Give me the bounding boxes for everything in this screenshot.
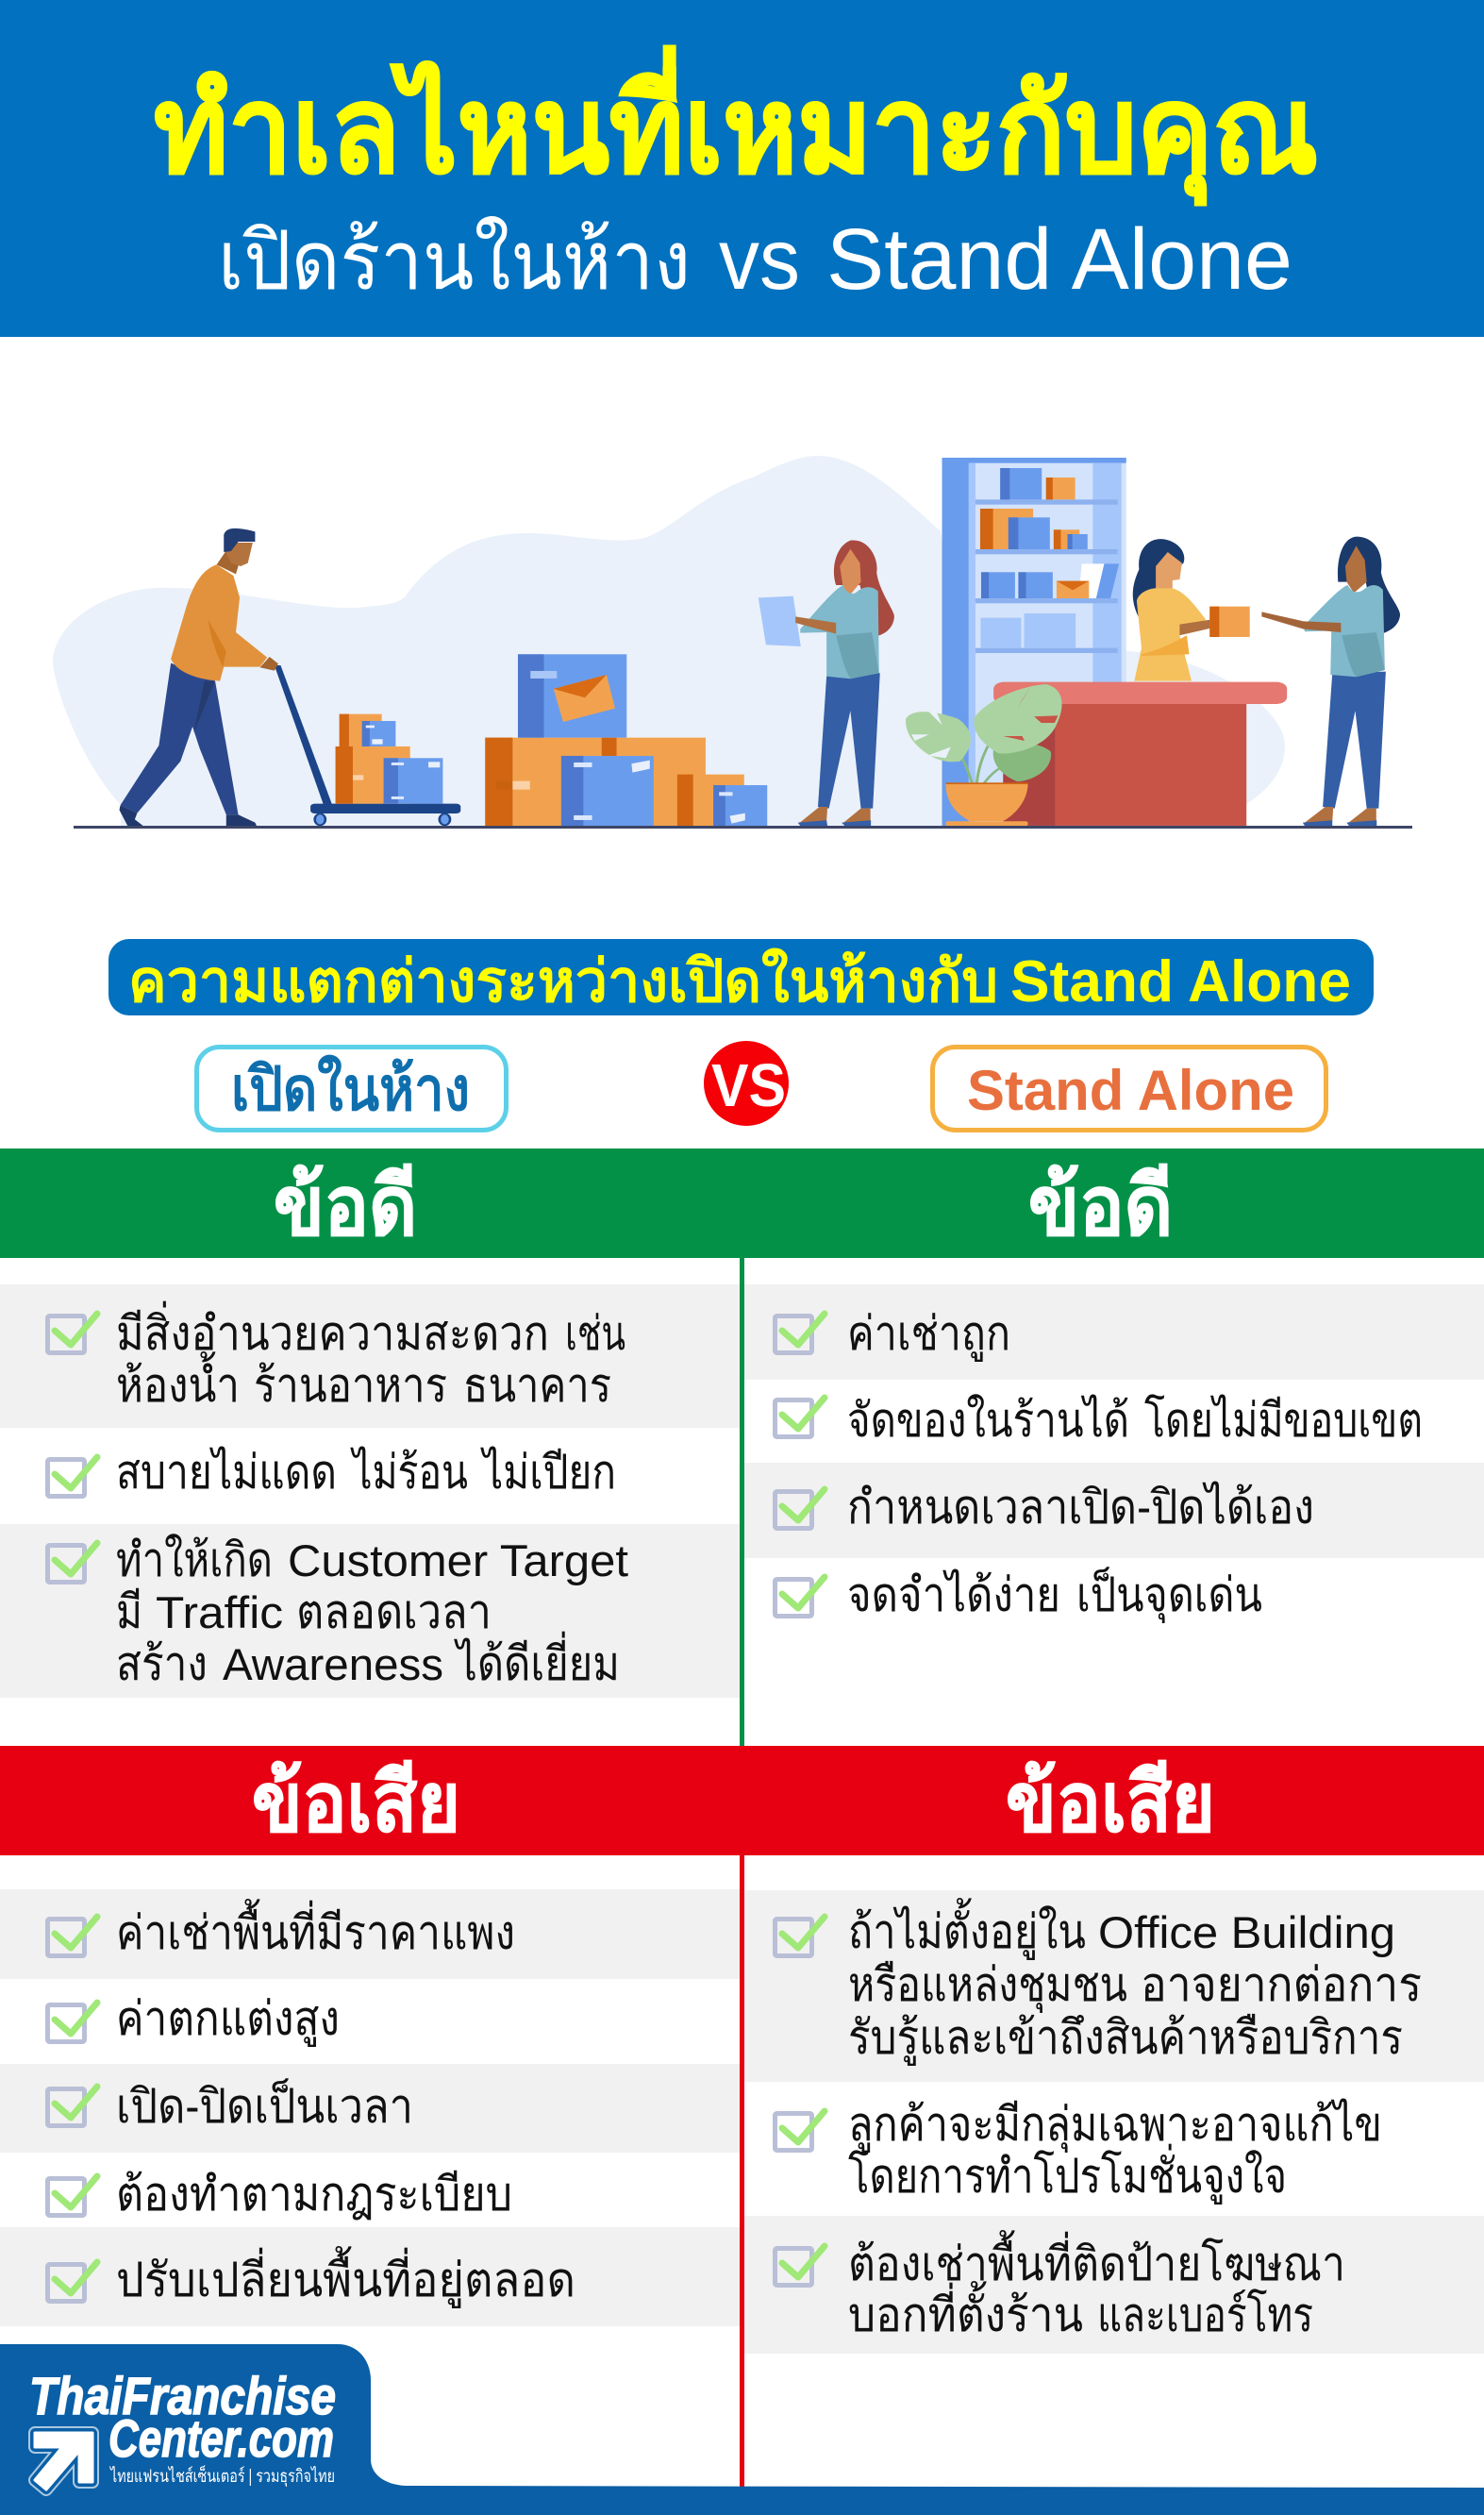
pros left: item 3: ตลอดเวลา [296,1585,492,1638]
cons right: item 3: และเบอร์โทร [1097,2289,1313,2341]
ground line [74,826,1412,829]
pros left: item 2: ไม่เปียก [480,1446,616,1499]
illustration: warehouse and shop scene [53,456,1412,829]
section heading pill: Stand Alone [1010,949,1351,1014]
man with cart and boxes [120,528,767,827]
footer logo and band: Center.com [108,2408,334,2468]
cons right: item 1: Office Building [1098,1907,1395,1957]
pros left: item 3: สร้าง [116,1637,208,1690]
subtitle: Stand Alone [826,211,1292,308]
cons left: item 4: ต้องทำตามกฎระเบียบ [116,2168,512,2221]
pros left: item 3 [0,1524,740,1698]
pros left: item 2: ไม่ร้อน [350,1446,468,1499]
plant in pot [936,705,1017,783]
red band: cons [0,1746,1484,1855]
pros left: item 1: เช่น [565,1307,625,1360]
footer logo and band [0,2344,1484,2515]
cons right: item 2: ลูกค้าจะมีกลุ่มเฉพาะอาจแก้ไข [848,2098,1382,2153]
cons left: item 3: เปิด-ปิดเป็นเวลา [116,2078,413,2133]
pros left: item 2 [47,1446,616,1499]
subtitle: เปิดร้านในห้าง [218,216,691,307]
cons right: item 2: โดยการทำโปรโมชั่นจูงใจ [848,2144,1287,2205]
cons right: item 3: บอกที่ตั้งร้าน [848,2281,1083,2341]
cons left: item 2 [47,1992,340,2047]
cons right: item 1 [744,1890,1484,2082]
label: in mall: เปิดในห้าง [231,1054,470,1123]
pros right: item 1: ค่าเช่าถูก [847,1307,1010,1362]
pros left: item 3: Traffic [156,1587,283,1637]
pros right: item 3: กำหนดเวลาเปิด-ปิดได้เอง [847,1481,1314,1534]
pros left: item 1: ห้องน้ำ [116,1351,240,1412]
cons right: item 3 [744,2216,1484,2354]
title: ทำเลไหนที่เหมาะกับคุณ [154,45,1318,206]
cons left: item 5 [0,2227,740,2326]
cons left: item 3 [0,2064,740,2153]
pros left: item 3: ได้ดีเยี่ยม [454,1632,620,1690]
shop scene with women, shelf and counter [759,458,1400,826]
green band: pros: ข้อดี [274,1161,417,1252]
subtitle: vs [719,211,800,308]
cons left: item 5: ปรับเปลี่ยนพื้นที่อยู่ตลอด [116,2246,575,2308]
header banner [0,0,1484,337]
cons left: item 1 [0,1889,740,1979]
pros right: item 3 [744,1463,1484,1558]
cons right: item 2 [775,2098,1382,2205]
pros right: item 2: จัดของในร้านได้ [847,1394,1129,1447]
cons right: item 1: รับรู้และเข้าถึงสินค้าหรือบริการ [848,2011,1403,2066]
section heading pill: ความแตกต่างระหว่างเปิดในห้างกับ [128,947,998,1014]
vs badge: VS [711,1051,786,1119]
pros right: item 4 [775,1567,1262,1623]
pros left: item 1: ธนาคาร [463,1359,611,1412]
footer logo and band: ThaiFranchise [29,2366,336,2425]
cons right: item 1: ถ้าไม่ตั้งอยู่ใน [848,1898,1086,1960]
pros right: item 1 [744,1284,1484,1380]
background blob [53,456,1285,827]
counter [1003,704,1056,826]
pros right: item 4: เป็นจุดเด่น [1076,1567,1262,1623]
green band: pros: ข้อดี [1028,1161,1173,1252]
woman behind counter [1133,539,1184,629]
pros left: item 2: สบายไม่แดด [116,1446,337,1499]
pros right: item 2: โดยไม่มีขอบเขต [1144,1394,1423,1447]
green band: pros [0,1149,1484,1258]
woman with clipboard [834,540,894,637]
cons left: item 1: ค่าเช่าพื้นที่มีราคาแพง [116,1899,515,1959]
cons right: item 1: อาจยากต่อการ [1141,1958,1422,2011]
label: stand alone: Stand Alone [967,1059,1294,1122]
shelf [942,458,1126,826]
pros left: item 1: มีสิ่งอำนวยความสะดวก [116,1301,549,1360]
red band: cons: ข้อเสีย [252,1757,460,1849]
red band: cons: ข้อเสีย [1006,1757,1215,1849]
pros left: item 3: ทำให้เกิด [116,1534,273,1586]
pros right: item 4: จดจำได้ง่าย [847,1568,1060,1621]
cons right: item 3: ต้องเช่าพื้นที่ติดป้ายโฆษณา [848,2230,1345,2290]
cons right: item 1: หรือแหล่งชุมชน [848,1958,1127,2013]
footer logo and band: ไทยแฟรนไชส์เซ็นเตอร์ | รวมธุรกิจไทย [108,2464,335,2488]
woman customer [1338,537,1400,635]
pros left: item 3: Awareness [223,1639,443,1689]
subtitle [218,211,1292,308]
pros left: item 3: มี [116,1585,142,1638]
icon: arrow [35,2433,92,2490]
section heading pill [108,939,1374,1015]
pros left: item 1 [0,1284,740,1428]
pros left: item 1: ร้านอาหาร [254,1359,447,1412]
label: stand alone [932,1048,1326,1131]
cons left: item 2: ค่าตกแต่งสูง [116,1992,340,2047]
pros right: item 2 [775,1394,1423,1447]
pros left: item 3: Customer Target [288,1535,628,1585]
